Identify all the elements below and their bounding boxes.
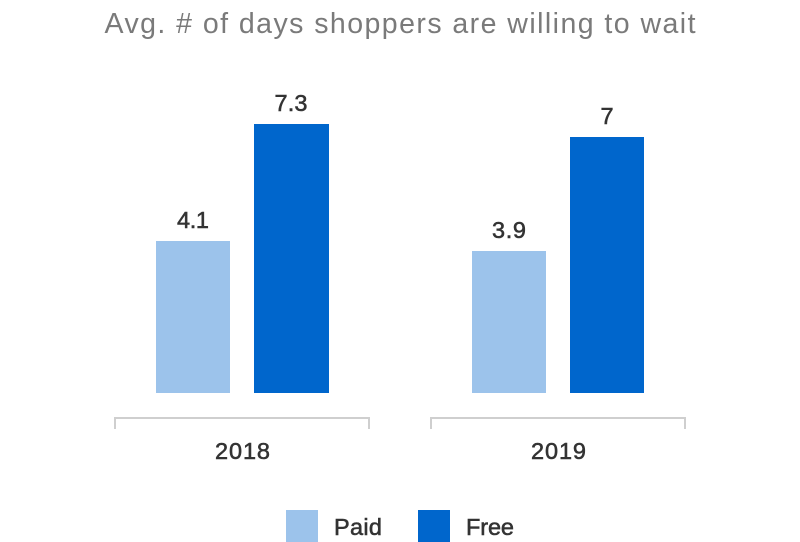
legend label: paid: Paid (334, 514, 382, 540)
bar chart (115, 90, 685, 464)
group: 2019 (431, 103, 685, 464)
legend swatch: paid (286, 510, 318, 542)
value: 4.1: 4.1 (177, 207, 209, 233)
axis label: 2019: 2019 (531, 438, 586, 464)
value: 7: 7 (600, 103, 614, 129)
legend label: free: Free (466, 514, 514, 540)
bar: 2019 paid (472, 251, 546, 393)
value: 3.9: 3.9 (492, 217, 526, 243)
bracket: 2019 (431, 418, 685, 429)
bracket: 2018 (115, 418, 369, 429)
bar: 2019 free (570, 137, 644, 393)
group: 2018 (115, 90, 369, 464)
bar: 2018 free (254, 124, 329, 393)
axis label: 2018: 2018 (215, 438, 270, 464)
legend swatch: free (418, 510, 450, 542)
legend (286, 510, 514, 542)
title: Avg. # of days shoppers are willing to wait (104, 8, 696, 40)
bar: 2018 paid (156, 241, 230, 393)
value: 7.3: 7.3 (274, 90, 308, 116)
